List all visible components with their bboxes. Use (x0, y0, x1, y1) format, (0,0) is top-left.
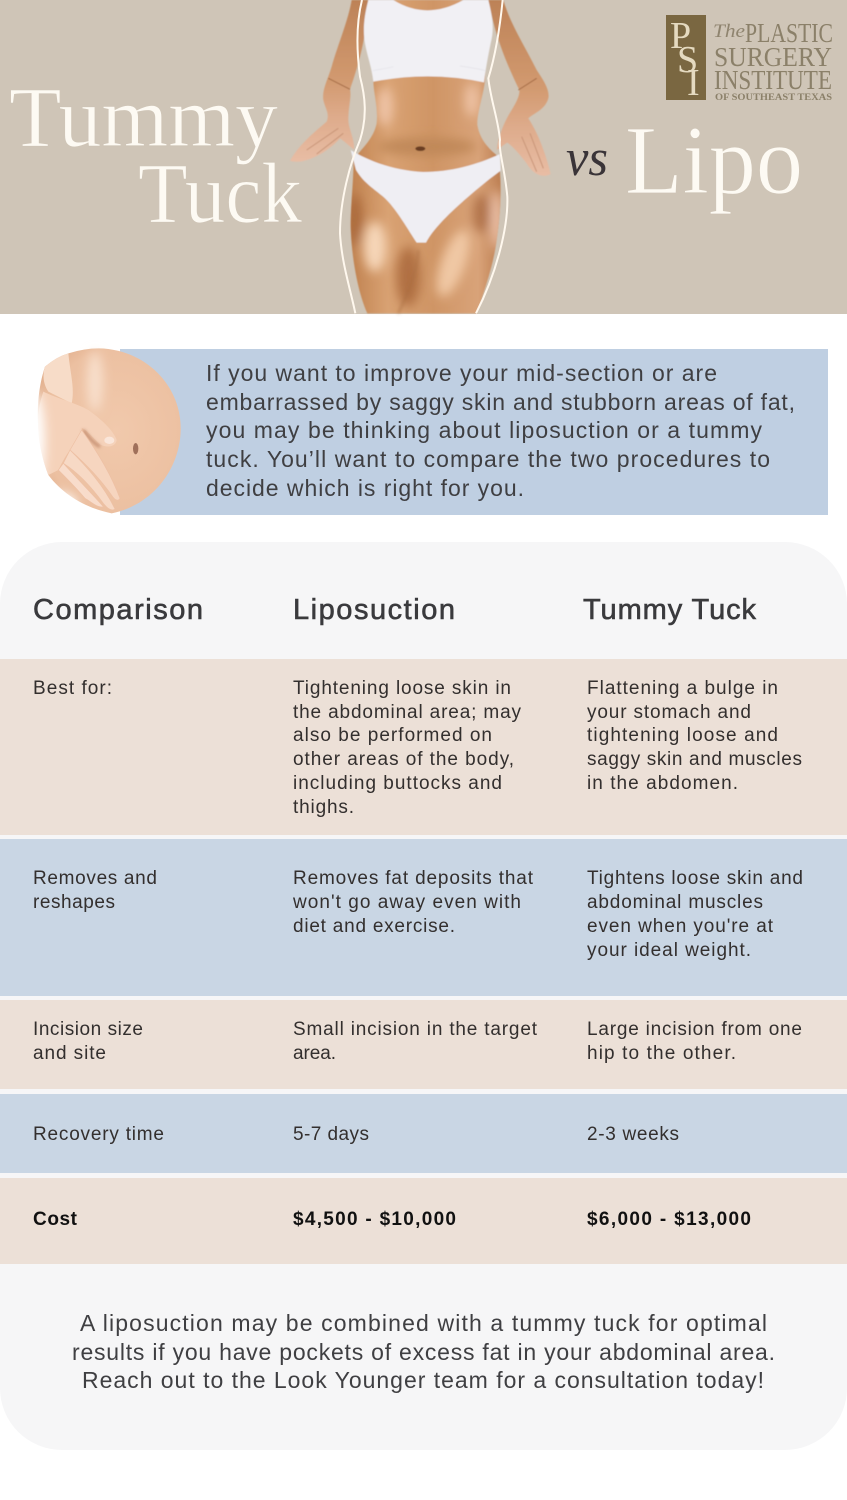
row: best for: including buttocks and (293, 773, 502, 794)
row: incision size and site: Small incision in the target (293, 1019, 538, 1040)
logo: Plastic Surgery Institute: The (713, 21, 745, 42)
logo: Plastic Surgery Institute: P (670, 15, 691, 57)
row: incision size and site (0, 1000, 847, 1089)
row: recovery time: 2-3 weeks (587, 1124, 679, 1145)
row: removes and reshapes: won't go away even with (292, 892, 521, 913)
logo: Plastic Surgery Institute: I (687, 62, 700, 104)
logo: Plastic Surgery Institute: S (677, 39, 698, 81)
table header row: Liposuction (293, 594, 455, 626)
white top (364, 0, 493, 82)
photo: woman's torso with contour lines (290, 0, 551, 313)
hand (38, 392, 120, 510)
closing text (72, 1310, 775, 1393)
closing text: A liposuction may be combined with a tummy tuck for optimal (80, 1310, 767, 1336)
comparison table card (0, 542, 847, 1450)
row: recovery time: 5-7 days (293, 1124, 369, 1145)
row: best for: also be performed on (293, 725, 492, 746)
intro panel (23, 348, 828, 515)
intro text: embarrassed by saggy skin and stubborn areas of fat, (206, 389, 795, 415)
row: best for (0, 659, 847, 835)
row: removes and reshapes: diet and exercise. (293, 916, 455, 937)
row: best for: Flattening a bulge in (587, 678, 778, 699)
row: recovery time (0, 1094, 847, 1173)
table header row (33, 594, 756, 626)
row: best for: Tightening loose skin in (293, 678, 511, 699)
photo: hands on abdomen (23, 348, 181, 514)
title: Tummy Tuck: Tuck (138, 145, 302, 241)
title: Tummy Tuck: Tummy (9, 69, 278, 165)
white fade at left edge (23, 392, 77, 514)
row: best for: the abdominal area; may (293, 702, 522, 723)
logo: Plastic Surgery Institute: OF SOUTHEAST TEXAS (715, 92, 832, 102)
row: removes and reshapes: Tightens loose skin and (587, 868, 803, 889)
logo: Plastic Surgery Institute (666, 15, 833, 104)
intro text: decide which is right for you. (206, 475, 524, 501)
row: removes and reshapes: abdominal muscles (587, 892, 763, 913)
navel (133, 443, 138, 454)
title: Lipo: Lipo (625, 107, 803, 215)
body contour lines (340, 0, 507, 313)
row: removes and reshapes: Removes and (33, 868, 157, 889)
row: incision size and site: Large incision from one (587, 1019, 802, 1040)
intro text (206, 360, 795, 501)
row: incision size and site: Incision size (33, 1019, 143, 1040)
row: best for: tightening loose and (587, 725, 778, 746)
navel (415, 146, 425, 151)
row: best for: in the abdomen. (587, 773, 738, 794)
row: cost: $6,000 - $13,000 (587, 1209, 751, 1230)
intro text: tuck. You’ll want to compare the two procedures to (206, 446, 770, 472)
table header row: Tummy Tuck (583, 594, 756, 626)
belly and thigh highlights (348, 83, 503, 307)
row: best for: other areas of the body, (293, 749, 514, 770)
text: vs: vs (566, 130, 608, 187)
row: cost: Cost (33, 1209, 78, 1230)
row: recovery time: Recovery time (33, 1124, 164, 1145)
closing text: Reach out to the Look Younger team for a consultation today! (82, 1367, 764, 1393)
row: removes and reshapes: even when you're at (587, 916, 774, 937)
closing text: results if you have pockets of excess fat in your abdominal area. (72, 1339, 775, 1365)
logo: Plastic Surgery Institute: SURGERY (714, 42, 832, 72)
row: incision size and site: area. (293, 1043, 336, 1064)
table header row: Comparison (33, 594, 203, 626)
row: best for: your stomach and (587, 702, 751, 723)
row: removes and reshapes: your ideal weight. (587, 940, 751, 961)
row: best for: Best for: (33, 678, 112, 699)
intro text: If you want to improve your mid-section or are (206, 360, 717, 386)
row: incision size and site: hip to the other. (587, 1043, 736, 1064)
row: cost: $4,500 - $10,000 (293, 1209, 456, 1230)
row: removes and reshapes: Removes fat deposits that (293, 868, 534, 889)
hero banner (0, 0, 847, 314)
intro text: you may be thinking about liposuction or a tummy (206, 417, 762, 443)
row: best for: thighs. (293, 797, 354, 818)
row: removes and reshapes: reshapes (33, 892, 115, 913)
white briefs (351, 150, 501, 243)
row: cost (0, 1178, 847, 1264)
row: best for: saggy skin and muscles (587, 749, 802, 770)
title: Tummy Tuck (9, 69, 302, 241)
row: removes and reshapes (0, 839, 847, 996)
row: incision size and site: and site (33, 1043, 106, 1064)
